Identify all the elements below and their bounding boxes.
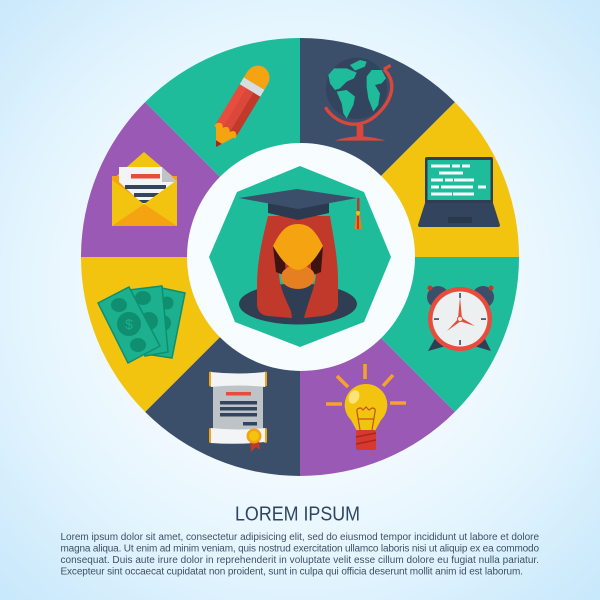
icon: diploma scroll xyxy=(209,372,267,452)
body text block: magna aliqua. Ut enim ad minim veniam, quis nostrud exercitation ullamco laboris nisi ut aliquip ex ea commodo xyxy=(60,544,539,554)
segment: bottom right purple xyxy=(300,257,455,476)
icon: graduate with cap xyxy=(239,189,362,324)
segmented wheel xyxy=(81,38,519,476)
body text block xyxy=(60,532,539,578)
segment: right lower green xyxy=(300,257,519,412)
center octagon xyxy=(209,166,391,347)
segment: top right navy xyxy=(300,38,455,257)
icon: light bulb xyxy=(326,364,406,450)
icon: envelope with letter xyxy=(112,152,177,226)
segment: left upper purple xyxy=(81,102,300,257)
icon: globe xyxy=(325,58,392,141)
body text block: consequat. Duis aute irure dolor in reprehenderit in voluptate velit esse cillum dolore eu fugiat nulla pariatur. xyxy=(60,555,539,566)
icon: alarm clock xyxy=(427,286,494,351)
icon: money bills xyxy=(98,286,185,363)
segment: right upper yellow xyxy=(300,102,519,257)
icon: money bills: $ xyxy=(125,316,133,332)
center white circle xyxy=(187,143,415,371)
icon: pencil xyxy=(206,61,274,153)
segment: top left green xyxy=(145,38,300,257)
body text block: Lorem ipsum dolor sit amet, consectetur adipisicing elit, sed do eiusmod tempor incididunt ut labore et dolore xyxy=(60,532,539,543)
body text block: Excepteur sint occaecat cupidatat non proident, sunt in culpa qui officia deserunt mollit anim id est laborum. xyxy=(60,566,523,578)
segment: left lower yellow xyxy=(81,257,300,412)
screen text lines xyxy=(431,164,486,196)
icon: laptop xyxy=(418,157,500,227)
segment: bottom left navy xyxy=(145,257,300,476)
title: LOREM IPSUM xyxy=(235,504,360,526)
